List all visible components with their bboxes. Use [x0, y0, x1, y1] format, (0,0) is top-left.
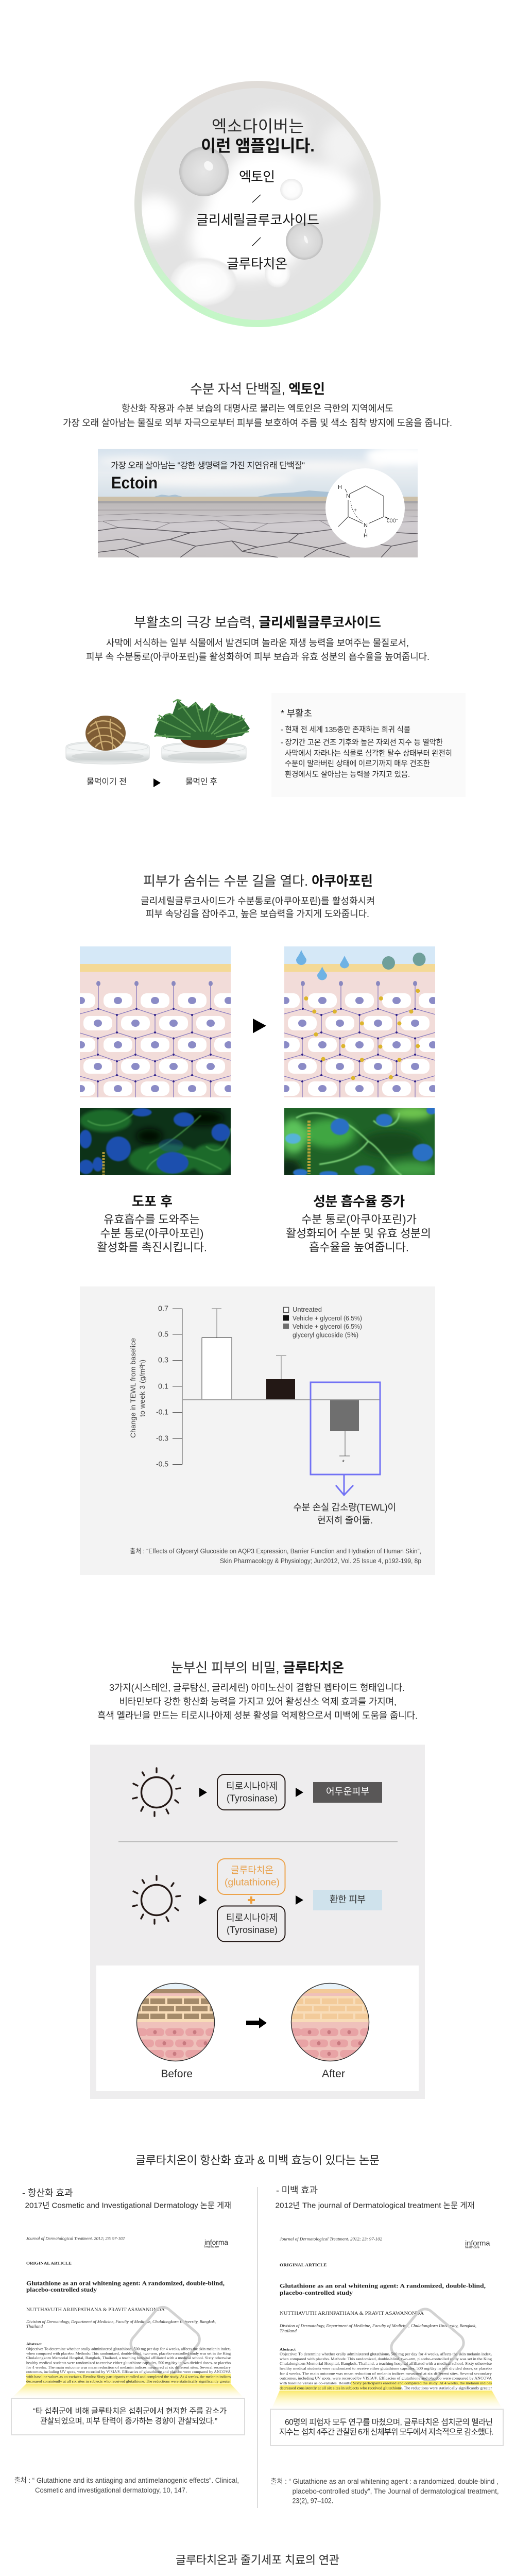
flow: dark skin [133, 1768, 382, 1816]
panel: before and after skin [96, 1965, 419, 2091]
aquaporin description: 피부 속당김을 잡아주고, 높은 보습력을 가지게 도와줍니다. [146, 909, 369, 919]
legend: Vehicle + glycerol (6.5%) [293, 1323, 362, 1330]
quote box [270, 2409, 503, 2446]
chart callout: 수분 손실 감소량(TEWL)이 [294, 1502, 396, 1513]
legend: Vehicle + glycerol (6.5%) [293, 1314, 362, 1322]
chart callout: 현저히 줄어듦. [317, 1515, 373, 1526]
column title: 2017년 Cosmetic and Investigational Dermatology 논문 게재 [25, 2201, 231, 2210]
quote box [11, 2398, 245, 2435]
paper thumbnail: Chulalongkorn Memorial Hospital, Bangkok, Thailand, a teaching hospital affiliated with a medical school. Sixty otherwise [280, 2361, 492, 2366]
paper thumbnail: decreased consistently at all six sites in subjects who received glutathione. The reductions were statistically significantly greater [26, 2379, 231, 2383]
arrow [246, 2018, 267, 2028]
highlight box and arrow [311, 1382, 380, 1495]
aquaporin description [141, 896, 375, 919]
ingredient list [196, 169, 319, 272]
paper thumbnail: decreased consistently at all six sites in subjects who received glutathione. The reductions were statistically significantly greater [280, 2385, 492, 2391]
diagram: skin cells after [284, 946, 435, 1097]
paper thumbnail: healthcare [204, 2245, 219, 2248]
glutathione description: 3가지(시스테인, 글루탐신, 글리세린) 아미노산이 결합된 펩타이드 형태입니다. [109, 1683, 405, 1693]
revived green plant in dish [154, 700, 250, 763]
source: 출처 : “ Glutathione as an oral whitening agent : a randomized, double-blind , [271, 2478, 499, 2485]
flow: bright skin: 글루타치온 [231, 1865, 273, 1875]
molecule diagram [325, 468, 405, 548]
caption: after application: 유효흡수를 도와주는 [104, 1213, 200, 1226]
caption: after application: 활성화를 촉진시킵니다. [97, 1241, 207, 1254]
y axis: to week 3 (g/m²h) [138, 1360, 146, 1417]
column title: - 항산화 효과 [22, 2188, 73, 2198]
bar: vehicle plus glycerol [266, 1356, 295, 1400]
column title [275, 2185, 475, 2210]
paper thumbnail: with baseline values as co-variates. Results: Sixty participants enrolled and completed the study. At 4 weeks, the melanin indices [26, 2374, 231, 2379]
quote box: 지수는 섭치 4주간 관찰된 6개 신체부위 모두에서 지속적으로 감소했다. [279, 2428, 493, 2437]
water drops [296, 950, 349, 980]
ring [134, 81, 381, 327]
gold absorption dots [304, 989, 420, 1080]
paper thumbnail: Glutathione as an oral whitening agent: A randomized, double-blind, [280, 2282, 486, 2290]
y axis: -0.5 [156, 1460, 168, 1468]
y axis: 0.7 [158, 1304, 168, 1313]
ectoin description: 가장 오래 살아남는 물질로 외부 자극으로부터 피부를 보호하여 주름 및 색소 침착 방지에 도움을 줍니다. [63, 418, 452, 428]
paper thumbnail: when compared with placebo. Methods: This randomized, double-blind, two-arm, placebo-controlled study was set in the King [280, 2357, 492, 2361]
quote box: 관찰되었으며, 피부 탄력이 증가하는 경향이 관찰되었다.” [40, 2417, 217, 2426]
paper thumbnail: Division of Dermatology, Department of Medicine, Faculty of Medicine, Chulalongkorn University, Bangkok, [279, 2323, 476, 2328]
molecule diagram: N [364, 522, 368, 529]
source: 23(2), 97–102. [293, 2497, 333, 2505]
glutathione description: 비타민보다 강한 항산화 능력을 가지고 있어 활성산소 억제 효과를 가지며, [119, 1697, 397, 1707]
y axis: 0.3 [158, 1356, 168, 1364]
before label: 물먹이기 전 [87, 777, 127, 786]
panel: resurrection plant notes: 수분이 말라버린 상태에 이르기까지 매우 건조한 [285, 759, 430, 768]
heading: aquaporin: 피부가 숨쉬는 수분 길을 열다. 아쿠아포린 [143, 873, 373, 889]
panel: resurrection plant notes: - 현재 전 세계 135종만 존재하는 희귀 식물 [281, 725, 410, 734]
panel: resurrection plant notes: - 장기간 고온 건조 기후와 높은 자외선 지수 등 열악한 [281, 738, 443, 747]
Ectoin label: Ectoin [111, 473, 158, 492]
panel: TEWL bar chart [80, 1286, 435, 1575]
paper thumbnail: Thailand [280, 2328, 297, 2333]
source: placebo-controlled study”, The Journal of dermatological treatment, [293, 2487, 499, 2495]
paper thumbnail: placebo-controlled study [26, 2286, 97, 2293]
diagram: skin cells before [80, 946, 231, 1097]
paper thumbnail: NUTTHAVUTH ARJINPATHANA & PRAVIT ASAWANONDA [280, 2311, 424, 2316]
before label: Before [161, 2068, 193, 2080]
panel: ectoin salt flat photo [98, 446, 438, 557]
paper thumbnail: when compared with placebo. Methods: This randomized, double-blind, two-arm, placebo-controlled study was set in the King [26, 2351, 231, 2355]
micrograph: before [79, 1108, 232, 1175]
glyceryl glucoside description [86, 638, 430, 662]
glyceryl glucoside description: 사막에 서식하는 일부 식물에서 발견되며 놀라운 재생 능력을 보여주는 물질로서, [106, 638, 409, 648]
source: Cosmetic and investigational dermatology, 10, 147. [35, 2486, 187, 2494]
legend: Untreated [293, 1306, 322, 1313]
skin before [129, 1983, 224, 2061]
y axis: -0.1 [156, 1408, 168, 1417]
glutathione description: 흑색 멜라닌을 만드는 티로시나아제 성분 활성을 억제함으로서 미백에 도움을 줍니다. [97, 1710, 418, 1721]
heading: papers: 글루타치온이 항산화 효과 & 미백 효능이 있다는 논문 [135, 2154, 380, 2167]
caption: after application [97, 1194, 207, 1254]
chart source: 출처 : “Effects of Glyceryl Glucoside on AQP3 Expression, Barrier Function and Hydration of Human Skin”, [130, 1548, 421, 1555]
paper thumbnail [279, 2236, 492, 2391]
hero circle [131, 81, 381, 327]
caption: absorption increase: 성분 흡수율 증가 [313, 1194, 405, 1209]
ingredient list: 글리세릴글루코사이드 [196, 212, 319, 228]
hero heading [201, 117, 315, 155]
glutathione description [97, 1683, 418, 1721]
bar: untreated [202, 1309, 232, 1400]
paper thumbnail: with baseline values as co-variates. Results: Sixty participants enrolled and completed the study. At 4 weeks, the melanin indices [280, 2381, 492, 2385]
flow: bright skin: (glutathione) [225, 1877, 280, 1888]
skin after [283, 1983, 379, 2061]
molecule diagram: H [364, 533, 368, 539]
caption: absorption increase [286, 1194, 431, 1254]
ingredient list: 글루타치온 [227, 256, 287, 272]
y axis: -0.3 [156, 1434, 168, 1443]
molecule diagram: H [338, 484, 342, 490]
source: 출처 : “ Glutathione and its antiaging and antimelanogenic effects”. Clinical, [14, 2477, 239, 2484]
paper thumbnail [26, 2236, 231, 2384]
arrow: before to after [253, 1019, 266, 1033]
arrow [153, 778, 161, 787]
bar: vehicle plus glycerol and glyceryl glucoside: * [342, 1458, 345, 1466]
after label: After [322, 2068, 345, 2080]
chart callout [294, 1502, 396, 1526]
heading: glyceryl glucoside: 부활초의 극강 보습력, 글리세릴글루코사이드 [134, 615, 381, 630]
molecule diagram: + [354, 508, 357, 513]
column title: - 미백 효과 [276, 2185, 318, 2196]
flow: dark skin: 어두운피부 [326, 1787, 369, 1797]
flow: bright skin [133, 1859, 382, 1941]
quote box: 60명의 피험자 모두 연구를 마쳤으며, 글루타치온 섭치군의 멜라닌 [285, 2417, 493, 2427]
paper thumbnail: outcomes, including UV spots, were recorded by VISIA®. Efficacies of glutathione and placebo were compared by ANCOVA [26, 2369, 231, 2374]
paper thumbnail: Objective: To determine whether orally administered glutathione, 500 mg per day for 4 weeks, affects the skin melanin index, [280, 2351, 492, 2357]
paper thumbnail: Journal of Dermatological Treatment. 2012; 23: 97-102 [26, 2236, 125, 2241]
flow: bright skin: 환한 피부 [330, 1894, 366, 1905]
panel: resurrection plant notes [271, 693, 466, 797]
panel: resurrection plant notes: * 부활초 [281, 708, 312, 719]
ingredient list: 엑토인 [239, 169, 275, 184]
paper thumbnail: placebo-controlled study [280, 2289, 353, 2296]
paper thumbnail: ORIGINAL ARTICLE [280, 2262, 327, 2267]
legend [283, 1306, 362, 1338]
paper thumbnail: outcomes, including UV spots, were recorded by VISIA®. Efficacies of glutathione and placebo were compared by ANCOVA [280, 2376, 492, 2380]
illustration: resurrection plant before and after [66, 700, 250, 787]
caption: absorption increase: 활성화되어 수분 및 유효 성분의 [286, 1227, 431, 1240]
paper thumbnail: NUTTHAVUTH ARJINPATHANA & PRAVIT ASAWANONDA [26, 2308, 165, 2313]
chart source [130, 1548, 421, 1565]
paper thumbnail: Division of Dermatology, Department of Medicine, Faculty of Medicine, Chulalongkorn University, Bangkok, [26, 2319, 216, 2324]
chart source: Skin Pharmacology & Physiology; Jun2012, Vol. 25 Issue 4, p192-199, 8p [220, 1557, 421, 1565]
heading: ectoin: 수분 자석 단백질, 엑토인 [190, 381, 325, 397]
caption: absorption increase: 흡수율을 높여줍니다. [309, 1241, 409, 1254]
bar: vehicle plus glycerol and glyceryl glucoside [330, 1400, 359, 1466]
panel: tyrosinase mechanism [90, 1744, 425, 2099]
paper thumbnail: Chulalongkorn Memorial Hospital, Bangkok, Thailand, a teaching hospital affiliated with a medical school. Sixty otherwise [26, 2355, 231, 2360]
paper thumbnail: Journal of Dermatological Treatment. 2012; 23: 97-102 [280, 2236, 383, 2241]
ectoin description: 항산화 작용과 수분 보습의 대명사로 불리는 엑토인은 극한의 지역에서도 [122, 403, 393, 414]
after label: 물먹인 후 [185, 777, 217, 786]
y axis: 0.1 [158, 1382, 168, 1391]
paper thumbnail: Thailand [26, 2324, 43, 2329]
panel: resurrection plant notes: 사막에서 자라나는 식물로 심각한 탈수 상태부터 완전히 [285, 749, 452, 758]
aquaporin description: 글리세릴글루코사이드가 수분통로(아쿠아포린)를 활성화시켜 [141, 896, 375, 906]
panel: resurrection plant notes: 환경에서도 살아남는 능력을 가지고 있음. [285, 770, 410, 779]
caption: after application: 수분 통로(아쿠아포린) [100, 1227, 204, 1240]
ectoin description [63, 403, 452, 428]
quote box: “타 섭취군에 비해 글루타치온 섭취군에서 현저한 주름 감소가 [33, 2407, 227, 2415]
heading: glutathione: 눈부신 피부의 비밀, 글루타치온 [171, 1660, 344, 1675]
hero heading: 엑소다이버는 [212, 117, 304, 135]
paper column: whitening [270, 2185, 503, 2505]
paper thumbnail: for 4 weeks. The main outcome was mean reduction of melanin indices measured at six different sites. Several secondary [26, 2365, 231, 2370]
paper thumbnail: healthcare [465, 2246, 480, 2249]
paper thumbnail: for 4 weeks. The main outcome was mean reduction of melanin indices measured at six different sites. Several secondary [280, 2371, 492, 2376]
paper thumbnail: informa [204, 2238, 228, 2246]
paper thumbnail: Abstract [26, 2342, 42, 2346]
y axis [129, 1304, 182, 1468]
molecule diagram: COO⁻ [387, 518, 398, 524]
heading: stem cells: 글루타치온과 줄기세포 치료의 연관 [176, 2553, 339, 2567]
source [271, 2478, 499, 2505]
paper thumbnail: informa [465, 2239, 490, 2247]
paper column: antioxidant [11, 2188, 245, 2494]
paper thumbnail: Abstract [280, 2347, 296, 2351]
caption: absorption increase: 수분 통로(아쿠아포린)가 [301, 1213, 417, 1226]
glyceryl glucoside description: 피부 속 수분통로(아쿠아포린)를 활성화하여 피부 보습과 유효 성분의 흡수율을 높여줍니다. [86, 652, 430, 662]
paper thumbnail: Objective: To determine whether orally administered glutathione, 500 mg per day for 4 weeks, affects the skin melanin index, [26, 2346, 231, 2351]
tagline: 가장 오래 살아남는 "강한 생명력을 가진 지연유래 단백질" [111, 461, 305, 470]
paper thumbnail: ORIGINAL ARTICLE [26, 2261, 72, 2266]
y axis: Change in TEWL from baselice [129, 1338, 137, 1438]
dry plant in dish [66, 716, 149, 764]
3D white blob background [131, 85, 376, 322]
paper thumbnail: healthy medical students were randomized to receive either glutathione capsules, 500 mg/day in two divided doses, or placebo [280, 2366, 492, 2371]
y axis: 0.5 [158, 1330, 168, 1338]
source [14, 2477, 239, 2494]
hero heading: 이런 앰플입니다. [201, 137, 315, 155]
molecule diagram: N [346, 493, 350, 499]
column title: 2012년 The journal of Dermatological treatment 논문 게재 [275, 2201, 475, 2210]
micrograph: after [276, 1106, 438, 1180]
column title [22, 2188, 231, 2210]
active ingredient drops [382, 953, 425, 970]
legend: glyceryl glucoside (5%) [293, 1331, 358, 1338]
caption: after application: 도포 후 [132, 1194, 173, 1209]
paper thumbnail: Glutathione as an oral whitening agent: A randomized, double-blind, [26, 2279, 225, 2286]
paper thumbnail: healthy medical students were randomized to receive either glutathione capsules, 500 mg/day in two divided doses, or placebo [26, 2361, 231, 2365]
